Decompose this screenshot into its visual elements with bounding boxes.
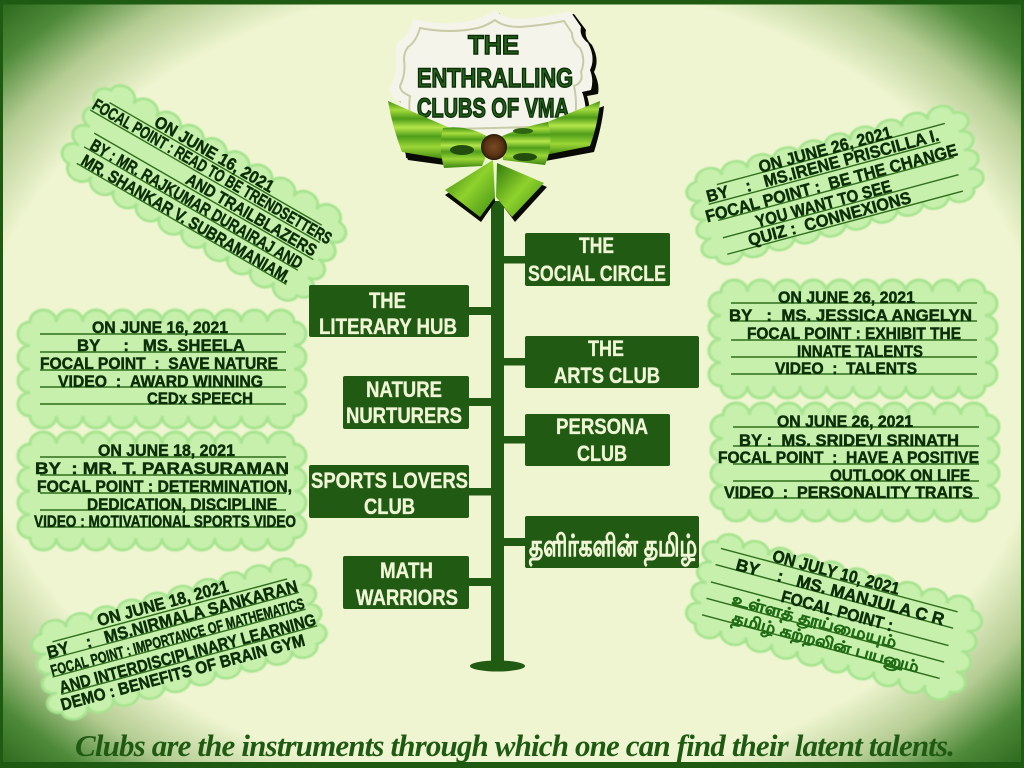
club box: the social circle: THE: [579, 233, 614, 258]
panel: persona club details: [711, 403, 999, 521]
panel: literary hub details: ON JUNE 16, 2021: [151, 112, 277, 196]
panel: math warriors details: BY : MS.NIRMALA SANKARAN: [45, 577, 300, 662]
panel: nature nurturers details: FOCAL POINT : SAVE NATURE: [40, 354, 278, 373]
panel: literary hub details: AND TRAILBLAZERS: [182, 170, 320, 260]
panel: sports lovers club details: DEDICATION, DISCIPLINE: [87, 495, 277, 514]
club box: persona club: PERSONA: [556, 414, 648, 439]
panel: tamil club details: FOCAL POINT :: [779, 587, 895, 635]
club box: sports lovers club: SPORTS LOVERS: [311, 468, 468, 493]
panel: math warriors details: DEMO : BENEFITS OF BRAIN GYM: [59, 631, 307, 714]
panel: literary hub details: [53, 75, 355, 311]
club box: the arts club: [525, 336, 699, 388]
panel: nature nurturers details: ON JUNE 16, 2021: [92, 318, 228, 337]
frame: right band: [1021, 0, 1024, 768]
club box: math warriors: MATH: [380, 558, 433, 583]
club box: the literary hub: LITERARY HUB: [319, 314, 457, 339]
frame: top band: [0, 0, 1024, 4]
title text: THE: [468, 30, 519, 60]
title text: CLUBS OF VMA: [417, 93, 569, 123]
club box: persona club: CLUB: [577, 441, 627, 466]
panel: math warriors details: AND INTERDISCIPLINARY LEARNING: [57, 610, 318, 697]
panel: nature nurturers details: [18, 310, 306, 428]
panel: persona club details: FOCAL POINT : HAVE A POSITIVE: [718, 448, 979, 467]
panel: social circle details: BY : MS.IRENE PRISCILLA I.: [704, 126, 941, 206]
club box: tamil club: தளிர்களின் தமிழ்: [529, 530, 697, 567]
panel: nature nurturers details: CEDx SPEECH: [147, 389, 253, 408]
title text: ENTHRALLING: [417, 63, 573, 93]
club box: the arts club: ARTS CLUB: [554, 363, 660, 388]
panel: math warriors details: ON JUNE 18, 2021: [95, 577, 230, 630]
central pole with foot: [468, 201, 526, 672]
frame: left band: [0, 0, 3, 768]
panel: nature nurturers details: BY : MS. SHEELA: [77, 336, 245, 355]
panel: math warriors details: FOCAL POINT : IMPORTANCE OF MATHEMATICS: [49, 596, 306, 680]
green bow and ribbon: [388, 101, 604, 222]
panel: math warriors details: [27, 553, 331, 725]
panel: sports lovers club details: VIDEO : MOTIVATIONAL SPORTS VIDEO: [34, 512, 296, 531]
panel: persona club details: VIDEO : PERSONALITY TRAITS: [724, 483, 973, 502]
panel: tamil club details: BY : MS. MANJULA C R: [734, 555, 946, 629]
panel: literary hub details: MR. SHANKAR V. SUBRAMANIAM.: [78, 151, 294, 287]
club box: nature nurturers: NURTURERS: [346, 403, 462, 428]
panel: literary hub details: BY : MR. RAJKUMAR DURAIRAJ AND: [87, 135, 306, 273]
club box: math warriors: [343, 556, 469, 610]
panel: tamil club details: [681, 528, 987, 706]
panel: persona club details: OUTLOOK ON LIFE: [830, 466, 970, 485]
club box: math warriors: WARRIORS: [356, 585, 458, 610]
club box: the literary hub: [309, 285, 469, 339]
panel: social circle details: QUIZ : CONNEXIONS: [746, 188, 913, 250]
club box: persona club: [525, 414, 670, 466]
club box: the arts club: THE: [588, 336, 624, 361]
club box: the social circle: [525, 233, 670, 286]
panel: tamil club details: உள்ளத் தூய்மையும்: [730, 591, 899, 653]
panel: social circle details: FOCAL POINT : BE THE CHANGE: [703, 141, 959, 226]
title plaque: [390, 10, 598, 158]
club box: sports lovers club: CLUB: [364, 494, 415, 519]
panel: nature nurturers details: VIDEO : AWARD WINNING: [58, 372, 263, 391]
panel: social circle details: YOU WANT TO SEE: [753, 177, 894, 231]
club box: the social circle: SOCIAL CIRCLE: [528, 261, 666, 286]
club box: nature nurturers: [343, 376, 469, 429]
panel: tamil club details: தமிழ் கற்றலின் பயனும்: [730, 609, 921, 677]
panel: arts club details: BY : MS. JESSICA ANGELYN: [729, 306, 972, 325]
panel: persona club details: BY : MS. SRIDEVI SRINATH: [739, 431, 959, 450]
club box: tamil club: [525, 516, 699, 568]
title text: [417, 30, 573, 123]
panel: social circle details: [682, 100, 988, 270]
panel: sports lovers club details: ON JUNE 18, 2021: [98, 441, 235, 460]
club box: sports lovers club: [309, 465, 469, 519]
panel: literary hub details: FOCAL POINT : READ TO BE TRENDSETTERS: [89, 95, 335, 248]
panel: arts club details: ON JUNE 26, 2021: [778, 288, 915, 307]
panel: arts club details: [709, 280, 997, 398]
tagline: Clubs are the instruments through which one can find their latent talents.: [75, 728, 955, 763]
panel: sports lovers club details: FOCAL POINT : DETERMINATION,: [37, 477, 292, 496]
panel: sports lovers club details: [18, 432, 306, 550]
panel: persona club details: ON JUNE 26, 2021: [777, 412, 913, 431]
frame: bottom band: [0, 762, 1024, 768]
panel: arts club details: VIDEO : TALENTS: [775, 359, 917, 378]
club box: the literary hub: THE: [369, 288, 406, 313]
panel: sports lovers club details: BY : MR. T. PARASURAMAN: [35, 459, 289, 478]
club box: nature nurturers: NATURE: [366, 377, 442, 402]
panel: tamil club details: ON JULY 10, 2021: [770, 546, 902, 599]
panel: arts club details: FOCAL POINT : EXHIBIT THE: [747, 324, 961, 343]
panel: arts club details: INNATE TALENTS: [797, 342, 923, 361]
icon: brown button: [482, 134, 506, 160]
panel: social circle details: ON JUNE 26, 2021: [756, 123, 894, 177]
